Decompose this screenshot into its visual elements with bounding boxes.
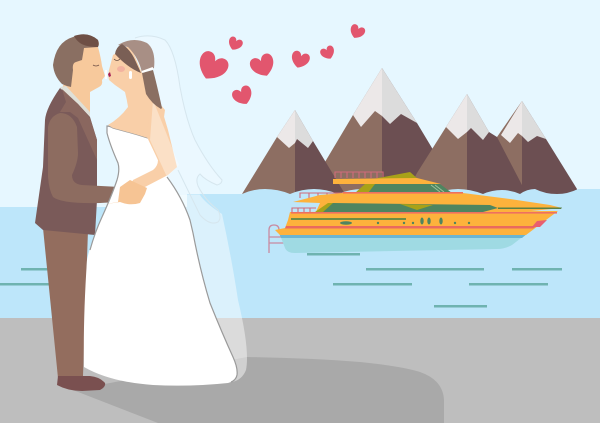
ground shadow bbox=[73, 357, 444, 423]
veil outline bbox=[135, 36, 222, 223]
portholes bbox=[340, 218, 470, 225]
green side line bbox=[291, 218, 406, 220]
heart bbox=[289, 50, 311, 70]
joined hands bbox=[100, 180, 147, 205]
hair highlight bbox=[74, 34, 98, 47]
shirt collar bbox=[60, 86, 90, 122]
long veil upper bbox=[135, 36, 222, 195]
lips bbox=[108, 72, 111, 77]
bow wedge bbox=[532, 220, 547, 227]
ground bbox=[0, 318, 600, 423]
earring bbox=[129, 71, 132, 79]
kiss highlight bbox=[105, 70, 107, 79]
neck and face bbox=[62, 47, 105, 118]
top canopy bbox=[373, 172, 418, 179]
hull stripe bbox=[279, 233, 528, 238]
ladder bbox=[269, 225, 285, 253]
shoe bbox=[57, 376, 105, 391]
bride bbox=[84, 40, 237, 386]
accent line bbox=[291, 212, 557, 214]
water bbox=[0, 189, 600, 320]
mountains bbox=[242, 68, 577, 196]
lapel bbox=[60, 89, 97, 160]
bridge olive bbox=[355, 184, 376, 193]
heart bbox=[248, 52, 278, 80]
dress bbox=[84, 126, 237, 386]
yacht bbox=[269, 172, 562, 253]
ripple lines bbox=[0, 253, 562, 308]
neck and chest bbox=[108, 45, 165, 160]
mountain 4 bbox=[470, 101, 577, 196]
second rail bbox=[300, 193, 343, 198]
main windows bbox=[323, 203, 498, 212]
bow line bbox=[498, 208, 562, 209]
top deck bbox=[333, 178, 441, 184]
heart bbox=[230, 84, 256, 108]
groom bbox=[35, 34, 120, 391]
arm bbox=[130, 100, 177, 188]
hearts bbox=[193, 23, 366, 108]
dress outline bbox=[90, 126, 237, 382]
third rail bbox=[292, 208, 316, 213]
hull bbox=[280, 235, 525, 253]
sky bbox=[0, 0, 600, 210]
heart bbox=[226, 35, 244, 53]
mountain 2 bbox=[305, 68, 460, 196]
heart bbox=[348, 23, 366, 41]
top rail bbox=[335, 172, 383, 178]
bridge window highlights bbox=[431, 185, 444, 192]
red stripe bbox=[285, 226, 537, 228]
long veil lower bbox=[170, 195, 247, 382]
eye bbox=[93, 65, 99, 66]
hair tail bbox=[142, 70, 162, 109]
hair bbox=[53, 35, 99, 87]
mountain 1 bbox=[242, 110, 345, 196]
heart bbox=[193, 49, 231, 85]
olive window edge bbox=[315, 203, 335, 212]
jacket bbox=[35, 88, 97, 235]
hair front bbox=[115, 44, 141, 73]
bridge windows bbox=[368, 184, 452, 193]
tiara bbox=[142, 68, 153, 72]
short veil bbox=[150, 100, 179, 177]
sleeve bbox=[48, 113, 120, 203]
mid deck bbox=[293, 193, 562, 214]
mountain 3 bbox=[405, 94, 530, 196]
centre olive accent bbox=[400, 204, 433, 210]
heart bbox=[319, 44, 337, 62]
hair crown bbox=[118, 40, 154, 73]
main hull body bbox=[275, 211, 558, 235]
trousers bbox=[43, 228, 88, 378]
blush bbox=[117, 66, 125, 72]
eye bbox=[114, 59, 120, 60]
